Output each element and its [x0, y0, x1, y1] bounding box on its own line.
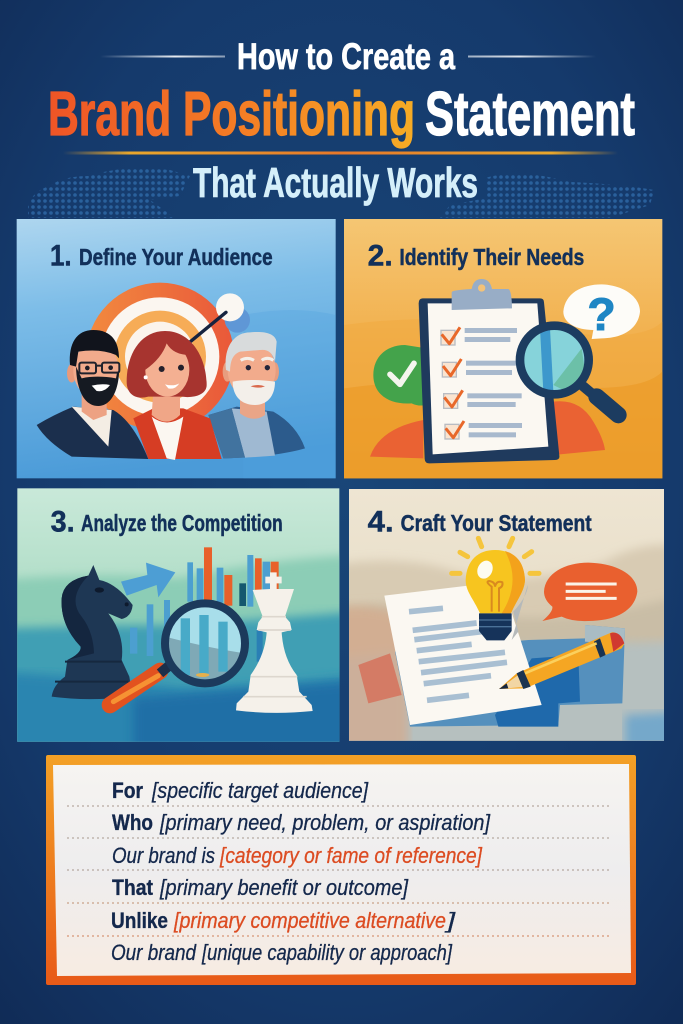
row 4: [primary benefit or outcome]	[159, 875, 409, 900]
heading 4: 4.	[368, 506, 394, 539]
panel 4: craft your statement	[349, 489, 664, 741]
panel 3: analyze the competition	[17, 488, 340, 742]
dotted world map	[28, 168, 654, 218]
heading 1: Define Your Audience	[79, 244, 273, 270]
person: older man	[208, 332, 305, 458]
heading 1: 1.	[50, 240, 72, 273]
row 1: [specific target audience]	[151, 778, 369, 803]
title rule	[63, 152, 618, 154]
row 3: [category or fame of reference]	[219, 843, 483, 868]
title line 2: orange: Brand Positioning	[48, 80, 415, 149]
bar chart	[130, 547, 279, 662]
icon: speech bubble	[542, 563, 637, 621]
row 3	[112, 843, 483, 868]
heading 4	[368, 506, 592, 539]
heading 1	[50, 240, 273, 273]
title line 1: How to Create a	[237, 36, 455, 77]
icon: pencil	[499, 632, 624, 689]
icon: white king	[236, 572, 313, 713]
heading 2: Identify Their Needs	[399, 244, 584, 270]
person: woman	[127, 331, 222, 460]
icon: lightbulb	[452, 538, 539, 640]
heading 3: 3.	[51, 506, 75, 539]
icon: question bubble	[563, 284, 640, 340]
heading 3	[51, 506, 283, 539]
row 5: Unlike	[111, 908, 168, 933]
row 5: [primary competitive alternative	[173, 908, 446, 933]
panel 1: define your audience	[17, 219, 336, 478]
icon: arrow	[121, 563, 175, 597]
row 6	[111, 940, 453, 965]
icon: magnifying glass	[520, 326, 618, 415]
title line 3: That Actually Works	[193, 159, 478, 206]
icon: black knight	[52, 565, 133, 699]
icon: green check bubble	[373, 345, 427, 406]
orange person shapes	[370, 401, 605, 458]
row 4: That	[112, 875, 154, 900]
panel 2: identify their needs	[344, 219, 662, 478]
row 1: For	[112, 778, 143, 803]
row 5: ]	[444, 908, 456, 933]
heading 2: 2.	[368, 240, 393, 273]
row 2: Who	[112, 810, 153, 835]
row 2: [primary need, problem, or aspiration]	[159, 810, 491, 835]
heading 3: Analyze the Competition	[81, 510, 283, 536]
icon: target	[86, 283, 250, 431]
icon: question bubble: ?	[587, 289, 616, 340]
icon: document	[384, 582, 542, 725]
statement template box	[46, 755, 636, 985]
box paper	[53, 764, 631, 976]
row 6: Our brand	[111, 940, 197, 965]
icon: magnifying glass	[110, 603, 245, 705]
icon: clipboard	[419, 279, 559, 463]
row 3: Our brand is	[112, 843, 215, 868]
box frame	[46, 755, 636, 985]
row 6: [unique capability or approach]	[201, 940, 453, 965]
heading 2	[368, 240, 584, 273]
title accent line left	[100, 56, 225, 58]
title	[48, 36, 635, 206]
heading 4: Craft Your Statement	[401, 510, 592, 536]
person: bearded man	[37, 330, 148, 459]
title accent line right	[468, 56, 596, 58]
color blocks	[358, 625, 625, 727]
